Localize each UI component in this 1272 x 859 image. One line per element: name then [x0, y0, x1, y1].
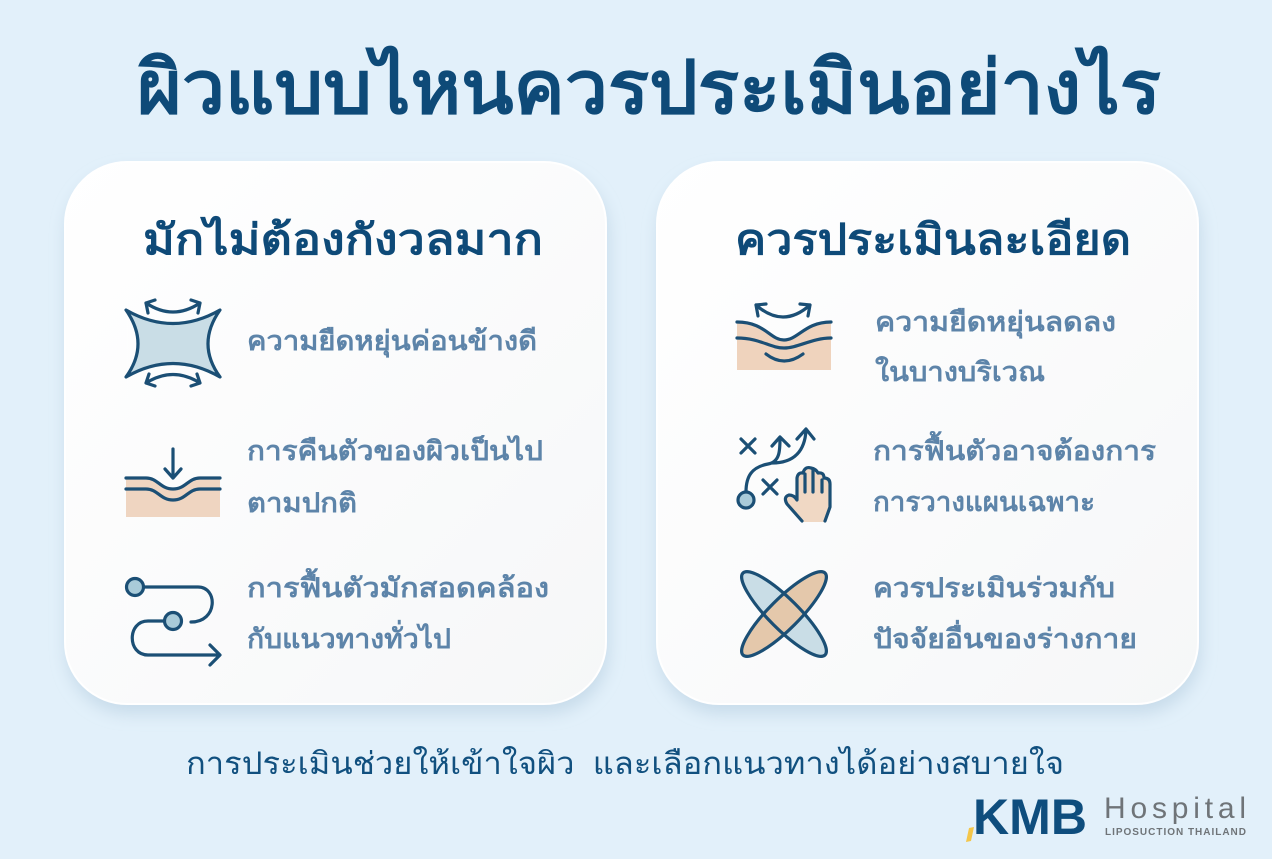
text: normal recovery: [247, 433, 543, 518]
panel: left: [65, 162, 606, 704]
text: normal recovery: การคืนตัวของผิวเป็นไป: [247, 433, 543, 466]
text: general guidance: [247, 567, 549, 654]
text: special planning: การวางแผนเฉพาะ: [873, 487, 1095, 517]
text: reduced elasticity: ความยืดหยุ่นลดลง: [875, 307, 1116, 339]
left panel heading: มักไม่ต้องกังวลมาก: [143, 215, 543, 263]
text: normal recovery: ตามปกติ: [247, 488, 357, 518]
text: reduced elasticity: [875, 307, 1116, 387]
icon: reduced elasticity: [737, 304, 831, 370]
icon: crossed ellipses: [732, 562, 836, 666]
logo mark: [966, 827, 974, 842]
text: assess with other factors: ปัจจัยอื่นของร่างกาย: [873, 619, 1137, 654]
text: special planning: การฟื้นตัวอาจต้องการ: [873, 430, 1157, 466]
right panel heading: ควรประเมินละเอียด: [735, 216, 1131, 263]
text: good elasticity: ความยืดหยุ่นค่อนข้างดี: [247, 326, 537, 358]
text: assess with other factors: [873, 573, 1137, 654]
text: special planning: [873, 430, 1157, 517]
text: general guidance: กับแนวทางทั่วไป: [247, 619, 451, 654]
logo wordmark KMB: KMB: [973, 789, 1087, 845]
logo Hospital: Hospital: [1104, 792, 1246, 825]
footer statement: การประเมินช่วยให้เข้าใจผิว และเลือกแนวทางได้อย่างสบายใจ: [186, 746, 1064, 781]
panel: right: [657, 162, 1198, 704]
text: assess with other factors: ควรประเมินร่วมกับ: [873, 573, 1115, 603]
icon: stretching skin square: [126, 300, 220, 386]
icon: plan with hand: [738, 429, 830, 522]
text: general guidance: การฟื้นตัวมักสอดคล้อง: [247, 567, 549, 603]
icon: winding path: [126, 578, 220, 665]
logo: [966, 789, 1246, 845]
title: ผิวแบบไหนควรประเมินอย่างไร: [137, 44, 1161, 129]
icon: skin pressed down: [126, 449, 220, 517]
text: reduced elasticity: ในบางบริเวณ: [875, 356, 1045, 387]
logo tagline: LIPOSUCTION THAILAND: [1105, 827, 1246, 838]
